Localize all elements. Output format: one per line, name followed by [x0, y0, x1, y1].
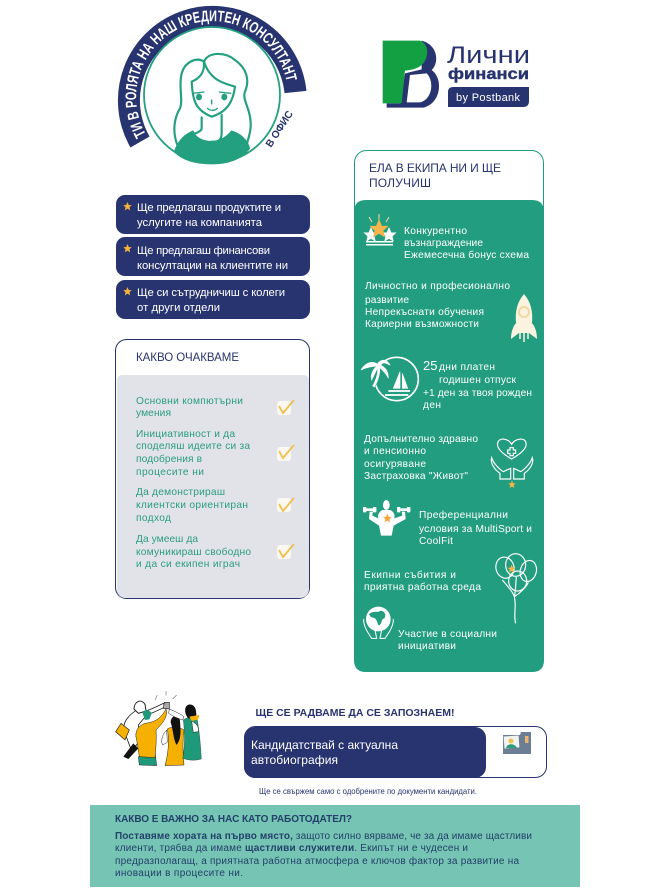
benefits heading: ЕЛА В ЕКИПА НИ И ЩЕ [369, 161, 501, 175]
CTA text: автобиография [251, 753, 338, 767]
logo pill [448, 87, 529, 107]
benefits heading: ПОЛУЧИШ [369, 176, 431, 190]
benefit: pay: Конкурентно [404, 226, 467, 237]
benefit: holiday: +1 ден за твоя рожден [423, 388, 532, 399]
icon: stars [363, 214, 397, 246]
logo word: финанси: финанси [448, 66, 529, 83]
note: approved candidates: Ще се свържем само с одобрените по документи кандидати. [259, 786, 477, 796]
portrait woman [174, 54, 251, 163]
panel grey body [117, 375, 309, 598]
panel heading: КАКВО ОЧАКВАМЕ [136, 352, 239, 364]
CTA filled part [244, 727, 486, 778]
CTA text: Кандидатствай с актуална [251, 738, 398, 752]
portrait circle [144, 27, 280, 163]
requirement 1: умения [136, 408, 171, 419]
icon: heart in hands [491, 439, 533, 488]
logo mark [383, 41, 439, 108]
benefit: holiday: 25 [423, 358, 437, 373]
requirement 2: подобрения в [136, 453, 202, 465]
values body text: клиенти, трябва да имаме щастливи служители. Екипът ни е чудесен и [115, 842, 468, 854]
values heading: КАКВО Е ВАЖНО ЗА НАС КАТО РАБОТОДАТЕЛ? [115, 814, 352, 825]
requirement 1 [136, 396, 294, 419]
requirement 2: Инициативност и да [136, 429, 235, 440]
requirement 2: споделяш идеите си за [136, 441, 250, 452]
requirement 4: Да умееш да [136, 534, 198, 545]
benefit: sport: условия за MultiSport и [419, 524, 532, 535]
requirement 2: процесите ни [136, 467, 204, 478]
badge arc title: ТИ В РОЛЯТА НА НАШ КРЕДИТЕН КОНСУЛТАНТ [125, 10, 298, 140]
requirement 3 [136, 487, 294, 524]
panel: employer values [90, 805, 580, 887]
logo word: Лични: Лични [447, 42, 530, 69]
badge: role with portrait [118, 6, 306, 164]
CTA outline [244, 726, 546, 778]
benefit: insurance [364, 434, 478, 482]
responsibility 2: консултации на клиентите ни [137, 260, 288, 272]
responsibilities list [116, 195, 310, 319]
logo pill text: by Postbank [456, 92, 520, 104]
call to action [244, 726, 546, 778]
responsibility 1: услугите на компанията [137, 217, 263, 229]
responsibility 3: от други отдели [137, 302, 220, 314]
icon: athlete with dumbbells [363, 500, 410, 536]
benefits green body [354, 200, 544, 672]
benefit: insurance: и пенсионно [364, 446, 426, 457]
values body text [115, 831, 532, 879]
icon: globe in hands [364, 607, 393, 638]
benefit: insurance: Допълнително здравно [364, 434, 478, 445]
benefit: holiday: ден [423, 400, 441, 411]
icon: palm and sailboat [361, 357, 418, 401]
benefit: development [365, 280, 510, 330]
requirement 3: клиентски ориентиран [136, 500, 248, 511]
badge arc band [129, 17, 296, 142]
benefit: development: Личностно и професионално [365, 280, 510, 292]
benefit: development: Непрекъснати обучения [365, 306, 484, 318]
requirement 1: Основни компютърни [136, 396, 243, 407]
responsibility 2: Ще предлагаш финансови [137, 245, 270, 257]
values background [90, 805, 580, 887]
responsibility 2 [116, 237, 310, 276]
benefit: sport: Преференциални [419, 509, 508, 521]
icon: CV folder [503, 732, 531, 754]
benefit: holiday [423, 358, 532, 411]
benefit: pay: възнаграждение [404, 238, 483, 249]
responsibility 3 [116, 280, 310, 319]
requirement 3: подход [136, 513, 171, 524]
benefit: pay [404, 226, 529, 261]
benefit: social initiatives [398, 629, 497, 652]
values body text: предразполагащ, а приятната работна атмосфера е ключов фактор за развитие на [115, 855, 519, 867]
icon: rocket [511, 294, 537, 342]
benefit: pay: Ежемесечна бонус схема [404, 249, 529, 261]
benefit: development: развитие [365, 295, 409, 306]
requirement 4 [136, 534, 294, 570]
requirement 4: и да си екипен играч [136, 559, 240, 570]
values body text: Поставяме хората на първо място, защото силно вярваме, че за да имаме щастливи [115, 831, 532, 842]
benefit: development: Кариерни възможности [365, 319, 479, 330]
responsibility 3: Ще си сътрудничиш с колеги [137, 287, 285, 299]
benefit: team events: Екипни събития и [364, 569, 456, 581]
panel outline [116, 340, 310, 598]
benefit: insurance: осигуряване [364, 459, 426, 470]
responsibility 1 [116, 195, 310, 234]
heading: glad to meet you: ЩЕ СЕ РАДВАМЕ ДА СЕ ЗАПОЗНАЕМ! [256, 707, 454, 719]
badge label: in office: В ОФИС [263, 108, 296, 150]
benefits outline [354, 150, 544, 250]
benefit: social initiatives: Участие в социални [398, 629, 497, 640]
benefit: team events [364, 569, 481, 593]
illustration: team high five [116, 691, 201, 766]
requirement 4: комуникираш свободно [136, 546, 251, 558]
requirement 2 [136, 429, 294, 478]
panel: what we expect [116, 340, 310, 598]
requirement 3: Да демонстрираш [136, 487, 225, 498]
logo: Лични финанси by Postbank [383, 41, 530, 108]
values body text: иновации в процесите ни. [115, 868, 243, 879]
benefit: holiday: годишен отпуск [439, 375, 517, 386]
icon: balloons [494, 554, 539, 623]
benefit: sport [419, 509, 532, 547]
benefit: holiday: дни платен [439, 362, 495, 373]
benefit: team events: приятна работна среда [364, 581, 481, 593]
panel: benefits [354, 150, 544, 672]
benefit: sport: CoolFit [419, 536, 453, 547]
benefit: insurance: Застраховка "Живот" [364, 471, 468, 482]
responsibility 1: Ще предлагаш продуктите и [137, 202, 281, 214]
benefit: social initiatives: инициативи [398, 641, 456, 652]
